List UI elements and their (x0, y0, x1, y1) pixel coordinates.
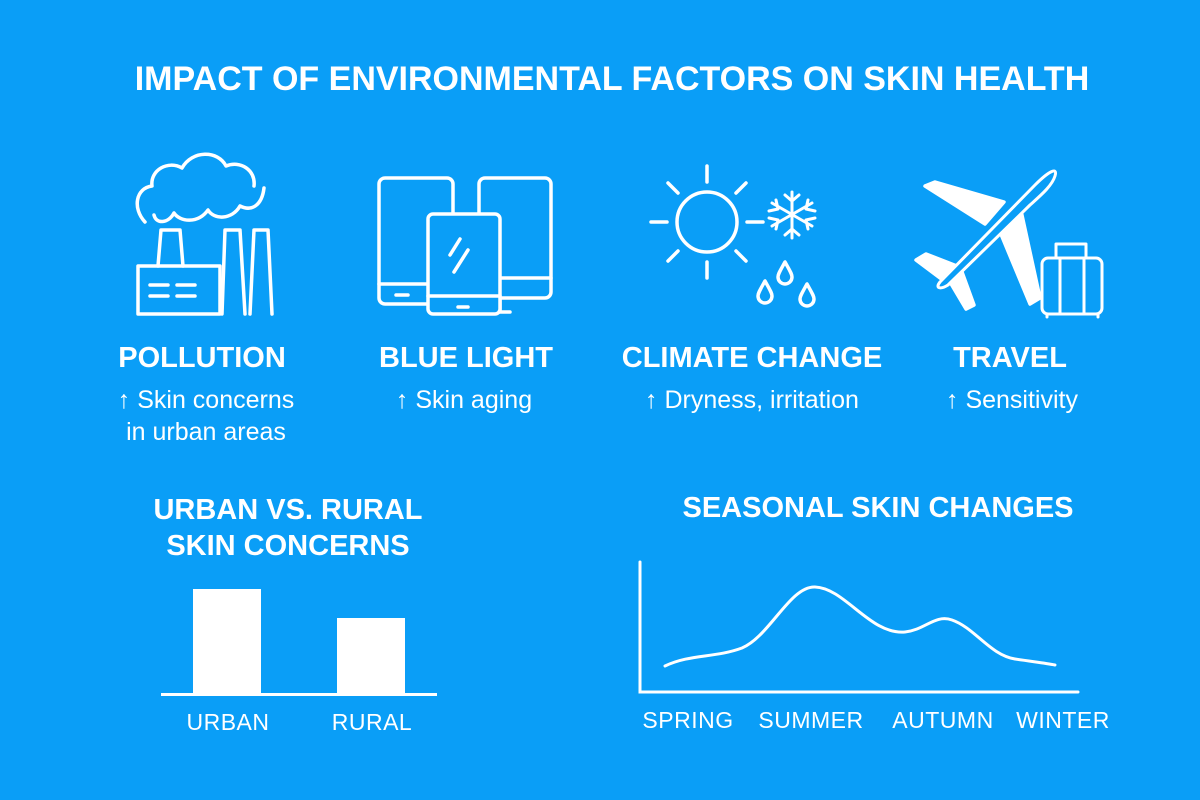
line chart: AUTUMN (892, 707, 994, 733)
bar chart (161, 589, 437, 735)
bar: urban (193, 589, 261, 695)
text: pollution: ↑ Skin concerns (118, 386, 294, 414)
heading: urban vs rural (153, 494, 423, 562)
icon: climate (651, 166, 815, 306)
bar: rural (337, 618, 405, 695)
line chart: SUMMER (758, 707, 864, 733)
heading: travel: TRAVEL (953, 342, 1067, 374)
text: travel: ↑ Sensitivity (946, 386, 1078, 414)
icon: plane and suitcase (916, 171, 1102, 317)
heading: urban vs rural: URBAN VS. RURAL (153, 494, 423, 526)
title: IMPACT OF ENVIRONMENTAL FACTORS ON SKIN HEALTH (135, 60, 1089, 98)
icon: devices (379, 178, 551, 314)
heading: urban vs rural: SKIN CONCERNS (166, 530, 410, 562)
heading: seasonal: SEASONAL SKIN CHANGES (682, 492, 1074, 524)
icon: factory (137, 154, 272, 314)
line chart (638, 560, 1110, 733)
label: rural: RURAL (332, 709, 412, 735)
label: urban: URBAN (186, 709, 270, 735)
line chart: WINTER (1016, 707, 1110, 733)
heading: pollution: POLLUTION (118, 342, 286, 374)
labels: seasons: SPRING (642, 707, 734, 733)
text: blue light: ↑ Skin aging (396, 386, 532, 414)
heading: climate change: CLIMATE CHANGE (622, 342, 882, 374)
text: pollution: in urban areas (126, 418, 286, 446)
heading: blue light: BLUE LIGHT (379, 342, 553, 374)
text: pollution (118, 386, 294, 446)
text: climate: ↑ Dryness, irritation (645, 386, 859, 414)
